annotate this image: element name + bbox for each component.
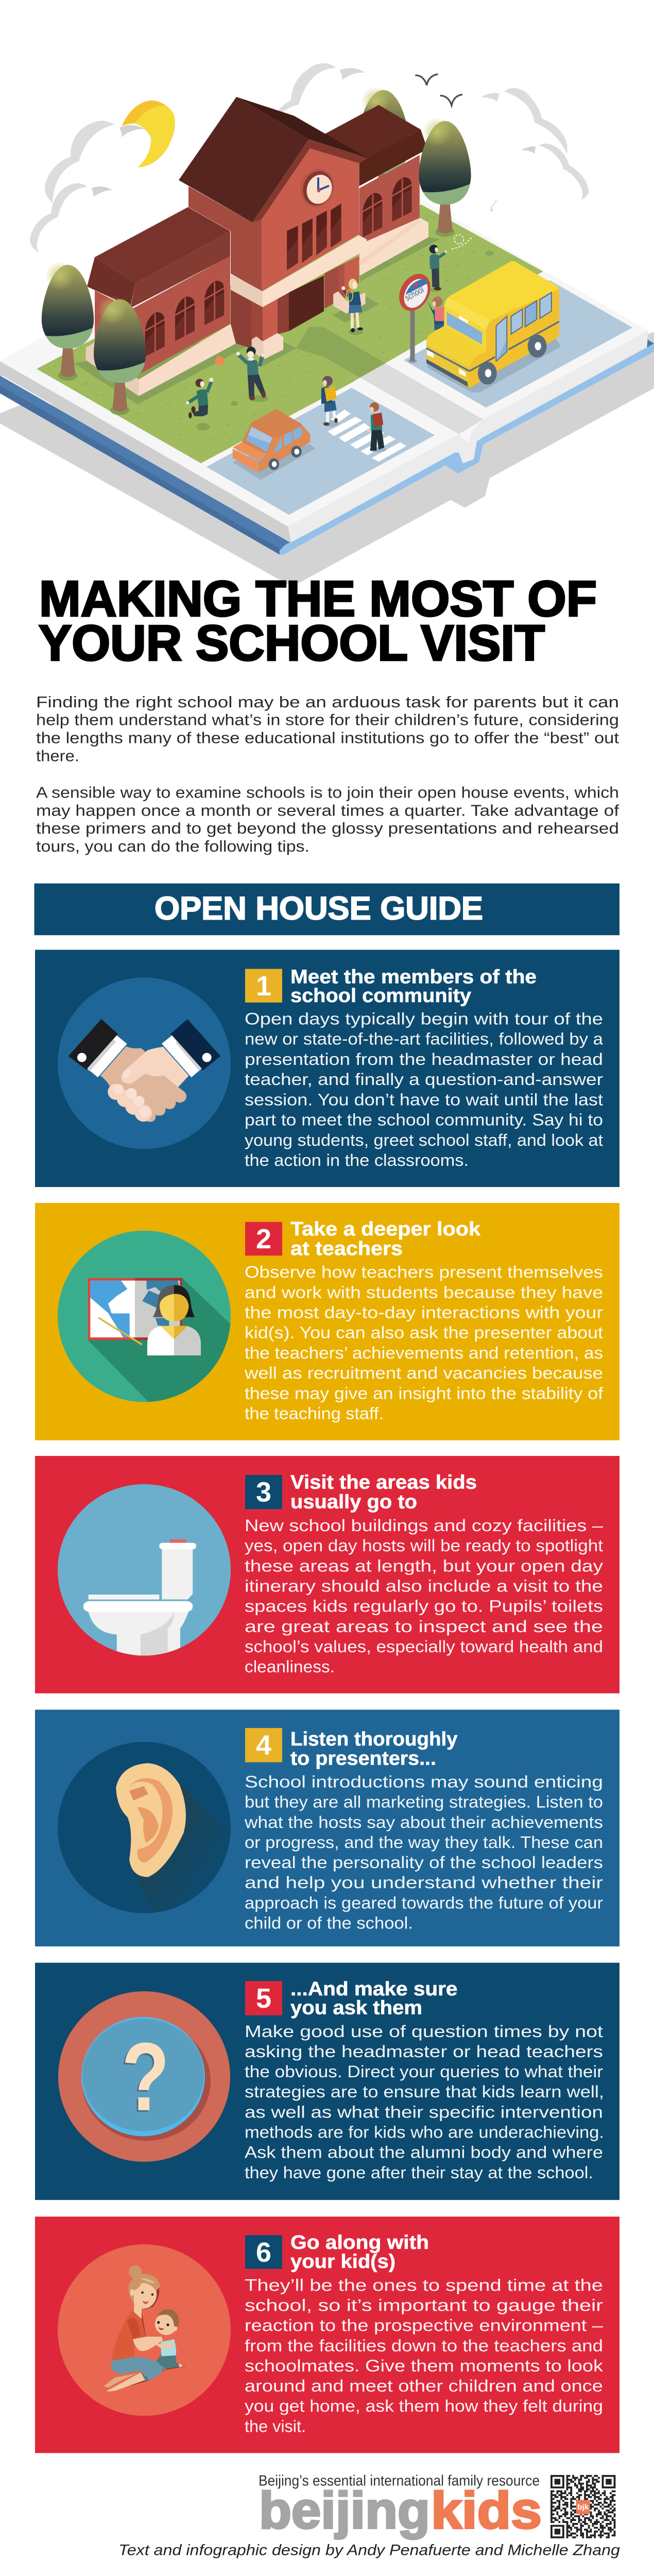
body text 1: young students, greet school staff, and look at <box>245 1130 603 1149</box>
icon: mother and child <box>58 2244 231 2416</box>
icon: question mark button <box>58 1991 230 2162</box>
heading 6: Go along with <box>290 2232 429 2253</box>
body text 3 <box>245 1516 604 1676</box>
heading 2: at teachers <box>290 1238 403 1260</box>
body text 3: itinerary should also include a visit to the <box>245 1577 603 1595</box>
body text 2: the teachers’ achievements and retention, as <box>245 1343 603 1362</box>
banner: open house guide: OPEN HOUSE GUIDE <box>154 890 483 926</box>
body text 4: and help you understand whether their <box>245 1873 603 1892</box>
number badge 6 <box>245 2235 282 2269</box>
foundation <box>86 324 236 396</box>
body text 1: Open days typically begin with tour of the <box>245 1009 603 1028</box>
icon: ear <box>58 1741 231 1913</box>
clock <box>296 164 339 211</box>
body text 1: part to meet the school community. Say hi to <box>245 1110 603 1129</box>
beijingkids logo <box>259 2482 542 2539</box>
body text 1: teacher, and finally a question-and-answer <box>245 1070 603 1089</box>
body text 2: Observe how teachers present themselves <box>245 1262 603 1281</box>
heading 1: school community <box>290 985 471 1007</box>
icon: teacher and board <box>58 1230 231 1402</box>
clouds <box>30 63 589 253</box>
body text 3: spaces kids regularly go to. Pupils’ toilets <box>245 1597 603 1616</box>
right wing <box>324 105 428 276</box>
girl behind bus stop <box>427 296 444 330</box>
design credit: Text and infographic design by Andy Penafuerte and Michelle Zhang <box>118 2542 620 2558</box>
body text 6: They’ll be the ones to spend time at the <box>245 2276 603 2294</box>
book shadow <box>0 332 654 587</box>
body text 5: they have gone after their stay at the school. <box>245 2163 593 2182</box>
tree 3 <box>419 117 471 237</box>
QR code: bjk <box>577 2503 589 2512</box>
body text 5: Ask them about the alumni body and where <box>245 2143 603 2162</box>
school bus sign: school <box>403 284 425 303</box>
panel: step 4 listen <box>35 1709 619 1963</box>
panel: step 6 go along <box>35 2216 619 2453</box>
crosswalk <box>328 410 406 462</box>
porch and pillars <box>231 290 263 352</box>
intro paragraph 2 <box>36 784 619 855</box>
intro paragraph 2: these primers and to get beyond the glossy presentations and rehearsed <box>36 819 619 837</box>
number badge 4: 4 <box>256 1730 271 1761</box>
number badge 4 <box>245 1728 282 1762</box>
body text 5: as well as what their specific intervention <box>245 2102 603 2121</box>
body text 5: methods are for kids who are underachieving. <box>245 2122 604 2141</box>
heading 6: your kid(s) <box>290 2251 395 2273</box>
body text 4: child or of the school. <box>245 1913 413 1932</box>
body text 3: New school buildings and cozy facilities – <box>245 1516 604 1535</box>
body text 4: approach is geared towards the future of your <box>245 1893 603 1912</box>
body text 2: these may give an insight into the stability of <box>245 1384 604 1402</box>
boy with red backpack <box>367 402 386 452</box>
body text 2 <box>244 1262 604 1423</box>
body text 4: or progress, and the way they talk. These can <box>245 1833 603 1852</box>
panel: step 2 teachers <box>35 1203 619 1440</box>
intro paragraph 1: help them understand what’s in store for their children’s future, considering <box>36 711 619 729</box>
body text 3: are great areas to inspect and see the <box>245 1617 603 1636</box>
body text 3: yes, open day hosts will be ready to spotlight <box>245 1536 603 1555</box>
body text 6: school, so it’s important to gauge their <box>245 2296 603 2315</box>
icon: question mark button: ? <box>120 2025 168 2133</box>
body text 2: kid(s). You can also ask the presenter about <box>245 1323 603 1342</box>
panel: step 3 areas kids go to <box>35 1456 619 1693</box>
tall windows <box>287 211 327 270</box>
birds <box>415 74 462 106</box>
body text 1 <box>245 1009 604 1170</box>
girl waving with hoop <box>341 279 364 335</box>
open book <box>0 198 654 554</box>
main gable tower <box>188 186 262 291</box>
intro paragraph 2: may happen once a month or several times a quarter. Take advantage of <box>36 801 619 819</box>
number badge 2 <box>245 1222 282 1256</box>
heading 5: you ask them <box>290 1997 422 2019</box>
tree behind building <box>357 86 409 206</box>
heading 3: Visit the areas kids <box>290 1472 477 1494</box>
heading 3: usually go to <box>290 1491 417 1513</box>
body text 5: Make good use of question times by not <box>245 2022 603 2041</box>
ball <box>215 357 225 366</box>
body text 1: presentation from the headmaster or head <box>245 1049 603 1069</box>
body text 5: the obvious. Direct your queries to what their <box>245 2062 603 2081</box>
body text 2: the teaching staff. <box>245 1404 384 1423</box>
right road <box>404 280 632 408</box>
intro paragraph 1: Finding the right school may be an arduous task for parents but it can <box>36 693 619 711</box>
QR code <box>550 2476 615 2537</box>
heading 4: Listen thoroughly <box>290 1728 458 1750</box>
heading 6 <box>290 2232 429 2273</box>
body text 5: strategies are to ensure that kids learn well, <box>245 2082 604 2101</box>
footer tagline: Beijing’s essential international family resource <box>259 2473 540 2489</box>
panel: step 1 meet the members <box>35 950 619 1187</box>
heading 2: Take a deeper look <box>290 1218 481 1240</box>
body text 6: around and meet other children and once <box>245 2376 603 2395</box>
number badge 2: 2 <box>256 1224 271 1255</box>
body text 4: but they are all marketing strategies. Listen to <box>245 1792 603 1811</box>
body text 4: what the hosts say about their achievements <box>244 1812 603 1832</box>
heading 2 <box>290 1218 481 1260</box>
heading 4: to presenters... <box>290 1748 436 1769</box>
number badge 1: 1 <box>256 971 271 1002</box>
body text 6: schoolmates. Give them moments to look <box>245 2356 604 2375</box>
body text 6: you get home, ask them how they felt during <box>245 2396 603 2415</box>
heading 3 <box>290 1472 477 1513</box>
left wing <box>95 290 139 375</box>
intro paragraph 1 <box>36 693 619 765</box>
title <box>39 571 597 671</box>
body text 6: from the facilities down to the teachers and <box>245 2336 603 2355</box>
body text 4: School introductions may sound enticing <box>245 1772 603 1791</box>
icon: question mark button: ? <box>122 2023 169 2131</box>
girl with yellow backpack <box>321 376 339 427</box>
grass tufts <box>49 355 311 456</box>
school building <box>86 97 428 396</box>
body text 3: cleanliness. <box>245 1657 335 1676</box>
beijingkids logo: kids <box>431 2482 542 2539</box>
moon <box>119 100 175 167</box>
orange car <box>232 409 315 480</box>
banner: open house guide <box>34 884 619 935</box>
number badge 6: 6 <box>256 2237 271 2268</box>
body text 1: the action in the classrooms. <box>245 1150 469 1170</box>
number badge 5: 5 <box>256 1983 271 2014</box>
intro paragraph 1: the lengths many of these educational institutions go to offer the “best” out <box>36 729 619 747</box>
body text 4: reveal the personality of the school leaders <box>245 1853 603 1872</box>
body text 3: these areas at length, but your open day <box>245 1556 604 1575</box>
yellow school bus <box>426 261 561 393</box>
body text 5 <box>245 2022 604 2182</box>
body text 3: school’s values, especially toward health and <box>245 1637 603 1656</box>
intro paragraph 2: A sensible way to examine schools is to join their open house events, which <box>36 784 619 801</box>
heading 1: Meet the members of the <box>290 966 537 988</box>
intro paragraph 2: tours, you can do the following tips. <box>36 837 309 855</box>
heading 4 <box>290 1728 458 1769</box>
body text 2: the most day-to-day interactions with your <box>245 1303 603 1321</box>
body text 1: new or state-of-the-art facilities, followed by a <box>245 1029 604 1048</box>
school bus sign <box>393 268 437 363</box>
boy standing waving <box>236 347 269 402</box>
dashed ball trail <box>452 235 473 249</box>
intro paragraph 1: there. <box>36 747 79 765</box>
body text 4 <box>244 1772 603 1932</box>
icon: handshake <box>58 977 231 1149</box>
number badge 3 <box>245 1475 282 1509</box>
heading 5 <box>290 1978 458 2019</box>
body text 2: well as recruitment and vacancies because <box>244 1363 603 1382</box>
body text 6 <box>245 2276 604 2436</box>
body text 2: and work with students because they have <box>245 1282 603 1301</box>
title: YOUR SCHOOL VISIT <box>39 615 545 671</box>
number badge 5 <box>245 1981 282 2015</box>
panel: step 5 ask them <box>35 1963 619 2200</box>
tree 2 <box>94 296 146 415</box>
lawn <box>37 205 543 463</box>
heading 1 <box>290 966 537 1007</box>
beijingkids logo: beijing <box>259 2482 430 2539</box>
boy jumping <box>186 378 213 418</box>
heading 5: ...And make sure <box>290 1978 458 2000</box>
body text 5: asking the headmaster or head teachers <box>245 2042 603 2061</box>
body text 1: session. You don’t have to wait until the last <box>245 1090 603 1109</box>
tree 1 <box>42 261 94 381</box>
number badge 3: 3 <box>256 1477 271 1507</box>
body text 6: reaction to the prospective environment – <box>245 2316 604 2335</box>
man waving <box>429 245 447 292</box>
icon: toilet <box>58 1484 231 1664</box>
number badge 1 <box>245 969 282 1003</box>
body text 6: the visit. <box>245 2417 306 2436</box>
title: MAKING THE MOST OF <box>39 571 597 626</box>
left road <box>206 388 435 515</box>
hero illustration: school on open book <box>0 63 654 587</box>
